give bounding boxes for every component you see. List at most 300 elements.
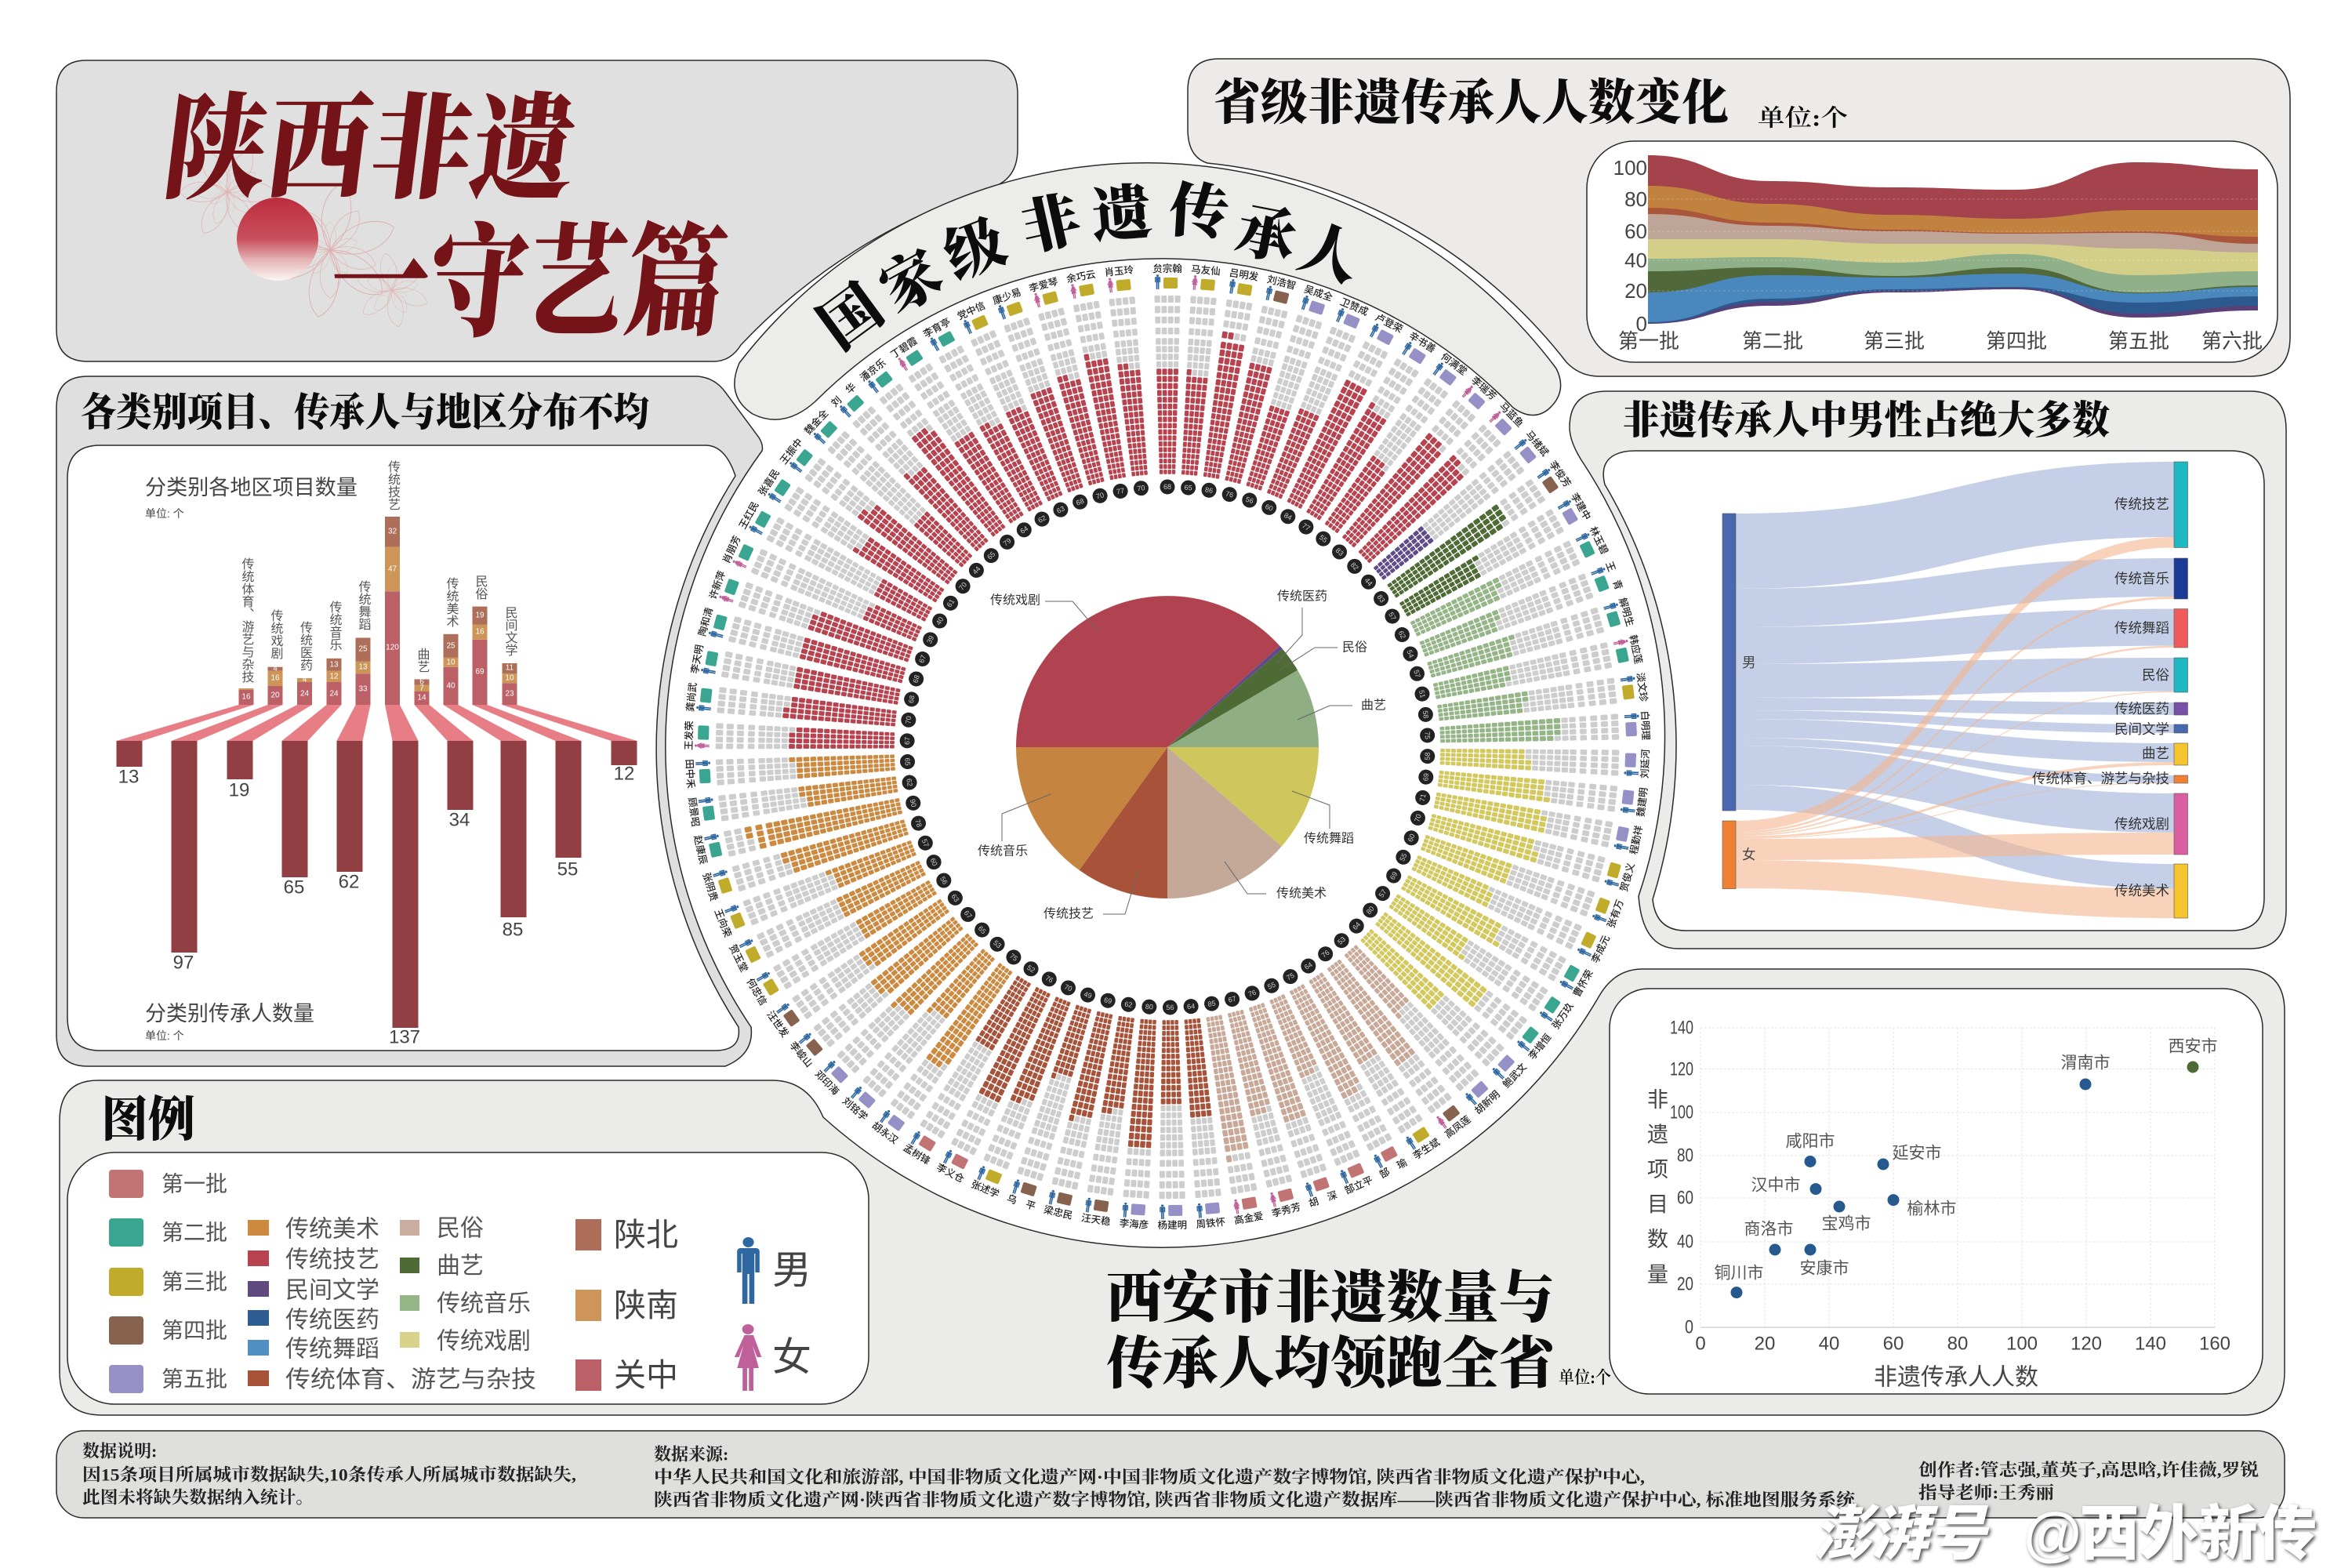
panel: gender sankey xyxy=(1570,391,2286,949)
bar: 白明理: 白明理 xyxy=(1639,710,1652,741)
bar: 程勤祥 xyxy=(1413,782,1645,855)
bar: 鲍武文: 鲍武文 xyxy=(1501,1061,1530,1091)
bar: 胡深: 胡 深 xyxy=(1307,1189,1339,1209)
bar: 王振中 xyxy=(778,436,978,602)
bar: 李义仓: 李义仓 xyxy=(935,1161,967,1185)
heading: xi'an line 2: 传承人均领跑全省 xyxy=(1106,1333,1558,1396)
data notes: 数据说明: xyxy=(82,1441,157,1461)
bar: 周铁怀: 64 xyxy=(1187,1002,1196,1011)
bar: 李成元: 李成元 xyxy=(1589,933,1612,965)
bar: 李爱琴: 70 xyxy=(1095,491,1105,500)
bar: 贺玉堂: 贺玉堂 xyxy=(727,942,750,974)
bar: 李增恒 xyxy=(1356,894,1554,1062)
bar: 韩应莲: 51 xyxy=(1417,689,1427,699)
pie labels: 民俗 xyxy=(1342,640,1367,654)
male links xyxy=(1736,462,2174,889)
scatter panel xyxy=(1610,989,2263,1394)
sankey labels: 男 xyxy=(1742,655,1756,670)
bar: 魏金全: 魏金全 xyxy=(802,407,831,437)
bar: 马蓝鱼: 82 xyxy=(1349,561,1360,572)
sankey labels: 传统音乐 xyxy=(2114,571,2169,586)
bar: 何忠信 xyxy=(744,864,958,1007)
y axis: 80 xyxy=(1677,1145,1693,1167)
x axis: 160 xyxy=(2199,1333,2230,1355)
bar: 张有万 xyxy=(1399,822,1626,930)
bar: 王发荣 xyxy=(683,720,915,756)
bar: 李秀芳: 李秀芳 xyxy=(1271,1200,1302,1219)
bar: 李峻山: 67 xyxy=(963,909,974,920)
stacked bars by region: 40 xyxy=(446,682,456,690)
category labels vertical: 传统戏剧 xyxy=(268,609,284,659)
stacked bars by region: 32 xyxy=(388,527,397,536)
panel: title xyxy=(56,60,1018,361)
bar: 顾景昭 xyxy=(686,767,919,827)
heading: national heirs: 家 xyxy=(869,238,954,325)
bar: 李瑞芳 xyxy=(1323,374,1499,567)
bar: 吕明发: 86 xyxy=(1204,486,1214,495)
bar: 张万玖: 57 xyxy=(1377,888,1388,899)
bar: 党中信 xyxy=(956,299,1077,523)
bar: 卫赞成: 卫赞成 xyxy=(1338,296,1370,318)
stacked bars by region: 24 xyxy=(329,690,339,698)
sankey labels: 女 xyxy=(1742,847,1756,862)
bar: 胡深 xyxy=(1236,982,1339,1209)
bar: 李海彦: 李海彦 xyxy=(1119,1217,1149,1231)
category labels vertical: 传统医药 xyxy=(298,621,313,672)
inheritor values: 34 xyxy=(449,809,470,831)
heading: national heirs: 人 xyxy=(1291,214,1368,296)
scatter points xyxy=(1731,1062,2198,1298)
inheritor values: 62 xyxy=(339,872,359,892)
unit note: 单位:个 xyxy=(1758,105,1848,132)
bar: 乌平: 49 xyxy=(1083,990,1093,1000)
x axis title: 非遗传承人人数 xyxy=(1874,1364,2038,1391)
bar: 胡永汉: 胡永汉 xyxy=(869,1120,900,1146)
bar: 李生斌 xyxy=(1292,952,1442,1162)
x axis labels: 第六批 xyxy=(2201,329,2263,353)
sankey labels: 传统体育、游艺与杂技 xyxy=(2032,771,2169,786)
bar: 李峻山 xyxy=(787,898,983,1069)
bar: 淡文珍: 58 xyxy=(1421,710,1430,719)
x axis: 100 xyxy=(2006,1333,2038,1355)
panel: lower combined legend and scatter xyxy=(60,969,2285,1415)
bar: 李俊芳: 李俊芳 xyxy=(1547,459,1573,489)
heading: national heirs: 级 xyxy=(935,209,1015,292)
category labels vertical: 传统舞蹈 xyxy=(356,580,372,630)
bar: 赵康辰: 赵康辰 xyxy=(691,834,710,866)
bar: 乌平: 乌 平 xyxy=(1006,1192,1037,1212)
bar: 肖玉玲: 肖玉玲 xyxy=(1104,263,1134,278)
bar: 梁忠民: 梁忠民 xyxy=(1043,1204,1074,1221)
category labels vertical: 传统技艺 xyxy=(386,460,401,510)
subheading: projects: 分类别各地区项目数量 xyxy=(145,476,358,499)
bar: 李义仓 xyxy=(935,966,1066,1185)
legend text: male: 男 xyxy=(772,1248,811,1292)
bar: 李建中: 57 xyxy=(1387,611,1398,622)
bar: 马绪斌: 44 xyxy=(1363,576,1374,587)
bar: 曹怀荣 xyxy=(1380,859,1595,999)
bar: 李俊芳 xyxy=(1367,459,1573,615)
bar: 贠宗翰: 贠宗翰 xyxy=(1152,263,1182,274)
credits xyxy=(1918,1460,2259,1502)
stacked bars by region: 10 xyxy=(505,674,514,682)
bar: 吴成全: 56 xyxy=(1244,495,1254,505)
inheritor values: 97 xyxy=(173,952,194,974)
bar: 贠宗翰 xyxy=(1152,263,1182,494)
city labels: 宝鸡市 xyxy=(1822,1215,1871,1232)
bar: 解明生 xyxy=(1406,597,1636,690)
stacked bars by region: 14 xyxy=(417,693,426,702)
bar: 胡深: 76 xyxy=(1247,989,1257,998)
legend: categories: 民俗 xyxy=(437,1215,484,1242)
category labels vertical: 传统体育、游艺与杂技 xyxy=(240,557,254,684)
bar: 何忠信: 56 xyxy=(938,875,949,886)
bar: 周铁怀: 周铁怀 xyxy=(1196,1216,1226,1230)
bar: 陶和清 xyxy=(696,606,927,695)
female links xyxy=(1736,537,2174,918)
y axis: 20 xyxy=(1677,1273,1693,1295)
legend: categories: 传统戏剧 xyxy=(437,1328,531,1355)
x axis xyxy=(1695,1333,2230,1355)
bar: 张有万: 60 xyxy=(1406,833,1417,843)
x axis: 80 xyxy=(1947,1333,1968,1355)
bar: 张万玖 xyxy=(1368,877,1576,1031)
stacked bars by region: 13 xyxy=(358,663,368,671)
bar: 田中禾: 田中禾 xyxy=(684,759,697,789)
bar: 刘铭学: 刘铭学 xyxy=(840,1094,870,1123)
bar: 杨建明: 56 xyxy=(1166,1004,1174,1011)
y axis: 0 xyxy=(1685,1317,1693,1338)
stacked bars by region xyxy=(238,517,517,705)
city labels: 榆林市 xyxy=(1907,1200,1957,1218)
bar: 李成元: 55 xyxy=(1398,852,1409,862)
data notes: 因15条项目所属城市数据缺失,10条传承人所属城市数据缺失, xyxy=(82,1465,576,1485)
bar: 顾景昭: 62 xyxy=(905,778,914,787)
bar: 曹怀荣: 69 xyxy=(1388,870,1399,881)
x axis labels xyxy=(1618,329,2263,353)
bar: 康少易: 68 xyxy=(1075,497,1085,507)
bar: 贠宗翰: 68 xyxy=(1163,483,1171,491)
legend: categories: 传统医药 xyxy=(285,1308,379,1333)
icon: male xyxy=(737,1237,760,1304)
sankey labels: 曲艺 xyxy=(2142,746,2169,761)
city labels: 铜川市 xyxy=(1714,1264,1764,1283)
bar: 张阴贵: 78 xyxy=(913,818,924,828)
bar: 郜立平: 55 xyxy=(1266,981,1277,991)
stacked bars by region: 16 xyxy=(270,674,280,682)
bar: 张有万: 张有万 xyxy=(1605,898,1626,930)
pie labels: 传统舞蹈 xyxy=(1304,831,1354,845)
y axis: 60 xyxy=(1677,1187,1693,1209)
unit note: 单位:个 xyxy=(1559,1367,1611,1388)
bar: 白明理: 75 xyxy=(1423,731,1432,739)
stacked bars by region: 4 xyxy=(273,665,278,673)
stacked bars by region: 25 xyxy=(358,644,368,654)
bar: 赵康辰 xyxy=(691,787,924,866)
bar: 韩应莲: 韩应莲 xyxy=(1627,633,1645,666)
bar: 卫赞成: 60 xyxy=(1264,503,1274,513)
bar: 邓印海: 65 xyxy=(977,924,988,935)
heading: 非遗传承人中男性占绝大多数 xyxy=(1622,398,2110,442)
bar: 何忠信: 何忠信 xyxy=(744,976,770,1007)
stacked bars by region: 11 xyxy=(506,663,514,673)
inheritor values: 12 xyxy=(614,764,634,784)
bar: 张阴贵 xyxy=(700,807,930,902)
y axis: 120 xyxy=(1670,1058,1693,1080)
sankey nodes xyxy=(1722,462,2187,918)
legend: batches: 第五批 xyxy=(162,1367,227,1391)
category labels vertical: 传统美术 xyxy=(444,577,459,627)
heading: national heirs: 国 xyxy=(808,274,895,361)
y axis title: 非遗项目数量 xyxy=(1644,1088,1668,1298)
bar: 许新萍 xyxy=(706,569,935,675)
bar: 田中禾: 65 xyxy=(903,757,912,766)
city labels: 延安市 xyxy=(1893,1145,1941,1162)
heading: national heirs: 非 xyxy=(1014,187,1087,263)
bar: 顾景昭: 顾景昭 xyxy=(686,797,701,827)
bar: 吕明发 xyxy=(1193,267,1260,500)
bar: 郜立平: 郜立平 xyxy=(1343,1174,1374,1196)
bar: 李生斌: 李生斌 xyxy=(1410,1136,1442,1162)
bar: 鲍武文 xyxy=(1341,910,1530,1091)
bar: 孟树锋 xyxy=(902,955,1047,1167)
panel: footer xyxy=(56,1431,2285,1518)
bar: 潘京乐 xyxy=(858,356,1024,557)
bar: 刘延河: 58 xyxy=(1424,752,1432,760)
bar: 陶和清: 68 xyxy=(911,674,921,684)
bar: 张喜民: 61 xyxy=(946,597,956,608)
legend: categories: 传统音乐 xyxy=(437,1290,531,1317)
bar: 李建中: 李建中 xyxy=(1569,491,1594,522)
unit note: 单位: 个 xyxy=(145,1029,184,1042)
watermark xyxy=(1813,1501,2317,1568)
legend heading: 图例 xyxy=(101,1094,195,1147)
fan connectors xyxy=(116,705,637,741)
bar: 孟树锋: 52 xyxy=(1025,964,1036,975)
bar: 淡文珍 xyxy=(1417,672,1650,731)
sankey labels: 民间文学 xyxy=(2114,721,2169,737)
legend: batches: 第三批 xyxy=(162,1270,227,1294)
bar: 高凤莲: 76 xyxy=(1320,949,1331,960)
legend: regions: 陕南 xyxy=(614,1287,678,1323)
bar: 梁忠民: 69 xyxy=(1103,996,1112,1005)
legend: categories: 曲艺 xyxy=(437,1253,484,1279)
bar: 余巧云 xyxy=(1065,268,1136,501)
stacked bars by region: 25 xyxy=(446,641,456,651)
bar: 高凤莲: 高凤莲 xyxy=(1443,1113,1473,1141)
pie labels: 传统戏剧 xyxy=(990,593,1040,607)
sankey labels: 传统美术 xyxy=(2114,883,2169,898)
y axis: 100 xyxy=(1670,1102,1693,1123)
bar: 李育亭: 李育亭 xyxy=(921,315,953,340)
bar: 王红民: 王红民 xyxy=(736,499,761,531)
bar: 韩应莲 xyxy=(1412,633,1645,710)
bar: 李秀芳 xyxy=(1216,989,1302,1219)
bar: 乌平 xyxy=(1006,983,1104,1212)
bar: 李俊芳: 83 xyxy=(1376,593,1387,604)
city labels: 汉中市 xyxy=(1751,1176,1800,1195)
bar: 马友仙: 65 xyxy=(1184,484,1192,492)
stacked bars by region: 16 xyxy=(475,627,485,637)
data sources xyxy=(654,1444,1856,1510)
bar: 鲍武文: 64 xyxy=(1351,920,1362,931)
bar: 肖玉玲: 70 xyxy=(1137,484,1145,492)
bar: 贺俊义: 70 xyxy=(1413,813,1423,823)
y axis labels: 100 xyxy=(1613,156,1647,180)
bar: 吕明发: 吕明发 xyxy=(1229,267,1260,283)
stacked bars by region: 16 xyxy=(241,693,251,701)
icon: female xyxy=(735,1324,761,1391)
bar: 王青: 王 青 xyxy=(1603,560,1624,591)
bar: 魏建明: 魏建明 xyxy=(1635,787,1650,818)
pie labels: 曲艺 xyxy=(1361,698,1386,712)
unit note: 单位: 个 xyxy=(145,507,184,520)
x axis: 40 xyxy=(1819,1333,1839,1355)
bar: 解明生: 57 xyxy=(1412,669,1422,678)
bar: 李秀芳: 67 xyxy=(1227,994,1237,1004)
y axis: 140 xyxy=(1670,1018,1693,1038)
city labels xyxy=(1714,1038,2217,1283)
bar: 王向荣: 王向荣 xyxy=(712,907,734,939)
bar: 许新萍: 许新萍 xyxy=(706,569,728,601)
bar: 李天明: 李天明 xyxy=(688,644,706,675)
bar: 刘浩智: 刘浩智 xyxy=(1266,273,1298,292)
bar: 郜瑜: 郜 瑜 xyxy=(1377,1156,1410,1181)
bar: 贺俊义 xyxy=(1406,801,1637,893)
bar: 龚尚武: 70 xyxy=(904,716,913,724)
bar: 高凤莲 xyxy=(1309,939,1473,1141)
legend: categories xyxy=(248,1215,536,1392)
bar: 张述学: 70 xyxy=(1063,982,1073,993)
bar: 肖朋芳: 39 xyxy=(925,634,935,644)
icon: peony line art xyxy=(165,130,445,343)
legend: batches: 第二批 xyxy=(162,1220,227,1245)
bar: 汪天稳: 汪天稳 xyxy=(1080,1211,1112,1228)
title: 守艺篇: 一守艺篇 xyxy=(323,216,732,352)
bar: 余巧云: 余巧云 xyxy=(1065,268,1097,285)
bar: 邓印海: 邓印海 xyxy=(813,1069,841,1098)
heading: xi'an: 西安市非遗数量与 xyxy=(1106,1267,1555,1330)
inheritor values: 19 xyxy=(229,779,249,801)
bar: 李瑞芳: 李瑞芳 xyxy=(1469,374,1499,402)
sankey labels xyxy=(1742,496,2169,898)
bar: 党中信: 63 xyxy=(1055,505,1066,515)
category labels vertical: 民俗 xyxy=(474,575,488,600)
x axis: 140 xyxy=(2135,1333,2166,1355)
pie chart xyxy=(978,590,1386,920)
bar: 赵康辰: 90 xyxy=(909,798,918,808)
bar: 王发荣: 王发荣 xyxy=(683,720,695,750)
bar: 汪天稳 xyxy=(1080,995,1145,1228)
stacked bars by region: 120 xyxy=(386,643,399,652)
stream chart xyxy=(1648,155,2258,334)
bar: 王振中: 王振中 xyxy=(778,436,805,466)
category labels vertical: 传统音乐 xyxy=(328,601,342,651)
data sources: 陕西省非物质文化遗产网·陕西省非物质文化遗产数字博物馆, 陕西省非物质文化遗产数据库——陕西省非物质文化遗产保护中心, 标准地图服务系统 xyxy=(654,1490,1856,1510)
data notes: 此图未将缺失数据纳入统计。 xyxy=(82,1488,314,1507)
city labels: 西安市 xyxy=(2169,1038,2217,1055)
bar: 李生斌: 64 xyxy=(1303,960,1314,971)
y axis: 40 xyxy=(1677,1231,1693,1253)
legend: categories: 传统美术 xyxy=(285,1217,379,1242)
icon: red sun xyxy=(237,198,318,281)
bar: 李峻山: 李峻山 xyxy=(787,1040,815,1069)
bar: 丁碧霞: 64 xyxy=(1018,524,1029,535)
bar: 龚尚武: 龚尚武 xyxy=(684,681,699,713)
bar: 杨建明: 杨建明 xyxy=(1158,1219,1187,1231)
bar: 丁碧霞: 丁碧霞 xyxy=(889,335,920,361)
bar: 王振中: 70 xyxy=(957,581,968,592)
bar: 王向荣: 57 xyxy=(920,838,931,848)
legend: regions: 陕北 xyxy=(614,1217,678,1253)
bar: 王向荣 xyxy=(712,826,938,939)
bar: 吴成全: 吴成全 xyxy=(1303,283,1334,303)
bar: 王发荣: 67 xyxy=(903,737,911,745)
pie leader lines xyxy=(1002,601,1352,914)
inheritor values: 137 xyxy=(389,1027,420,1047)
inheritor values: 13 xyxy=(118,767,139,787)
bar: 李天明 xyxy=(688,644,921,715)
heading: 各类别项目、传承人与地区分布不均 xyxy=(81,390,649,434)
bar: 李海彦: 80 xyxy=(1145,1003,1153,1011)
bar: 邓印海 xyxy=(813,914,998,1098)
bar: 潘京乐: 79 xyxy=(1002,536,1013,547)
stacked bars by region: 19 xyxy=(475,612,485,619)
stacked bars by region: 4 xyxy=(303,676,307,684)
pie labels xyxy=(978,590,1386,920)
bar: 刘华 xyxy=(829,380,1007,571)
credits: 指导老师:王秀丽 xyxy=(1918,1483,2054,1502)
bar: 马绪斌: 马绪斌 xyxy=(1523,428,1552,459)
sankey labels: 传统技艺 xyxy=(2114,496,2169,512)
stacked bars by region: 7 xyxy=(419,684,424,693)
legend text: female: 女 xyxy=(772,1335,811,1379)
x axis: 60 xyxy=(1883,1333,1904,1355)
heading: national heirs xyxy=(808,178,1368,361)
heading: 省级非遗传承人人数变化 xyxy=(1214,75,1729,130)
bar: 魏建明 xyxy=(1417,761,1650,818)
bar: 高金爱: 85 xyxy=(1207,999,1216,1008)
x axis labels: 第一批 xyxy=(1618,329,1679,353)
bar: 郜立平 xyxy=(1255,973,1374,1196)
bar: 李育亭 xyxy=(921,315,1058,532)
stacked bars by region: 23 xyxy=(505,690,514,698)
pie labels: 传统医药 xyxy=(1277,590,1327,604)
bar: 梁忠民 xyxy=(1043,990,1124,1221)
y axis xyxy=(1670,1018,1693,1338)
y axis labels: 20 xyxy=(1624,279,1647,303)
bar: 高金爱: 高金爱 xyxy=(1233,1210,1265,1226)
bar: 张万玖: 张万玖 xyxy=(1549,1000,1576,1031)
radial bar chart xyxy=(683,263,1652,1231)
bar: 王青: 54 xyxy=(1405,649,1415,659)
legend: categories: 传统技艺 xyxy=(285,1247,379,1273)
x axis: 0 xyxy=(1695,1333,1706,1355)
bar: 张喜民: 张喜民 xyxy=(756,466,782,498)
bar: 魏建明: 69 xyxy=(1421,773,1430,782)
bar: 陶和清: 陶和清 xyxy=(696,606,715,637)
bar: 许新萍: 67 xyxy=(917,654,927,664)
bar: 马绪斌 xyxy=(1353,428,1552,598)
bar: 辛书善: 77 xyxy=(1301,521,1312,532)
bar: 张述学: 张述学 xyxy=(970,1178,1001,1200)
bar: 张阴贵: 张阴贵 xyxy=(700,871,720,902)
bar: 丁碧霞 xyxy=(889,335,1041,544)
bar: 刘浩智: 76 xyxy=(1225,490,1234,499)
watermark: 澎湃号 xyxy=(1813,1501,1990,1568)
bar: 孟树锋: 孟树锋 xyxy=(902,1142,933,1167)
y axis labels: 0 xyxy=(1636,312,1647,336)
